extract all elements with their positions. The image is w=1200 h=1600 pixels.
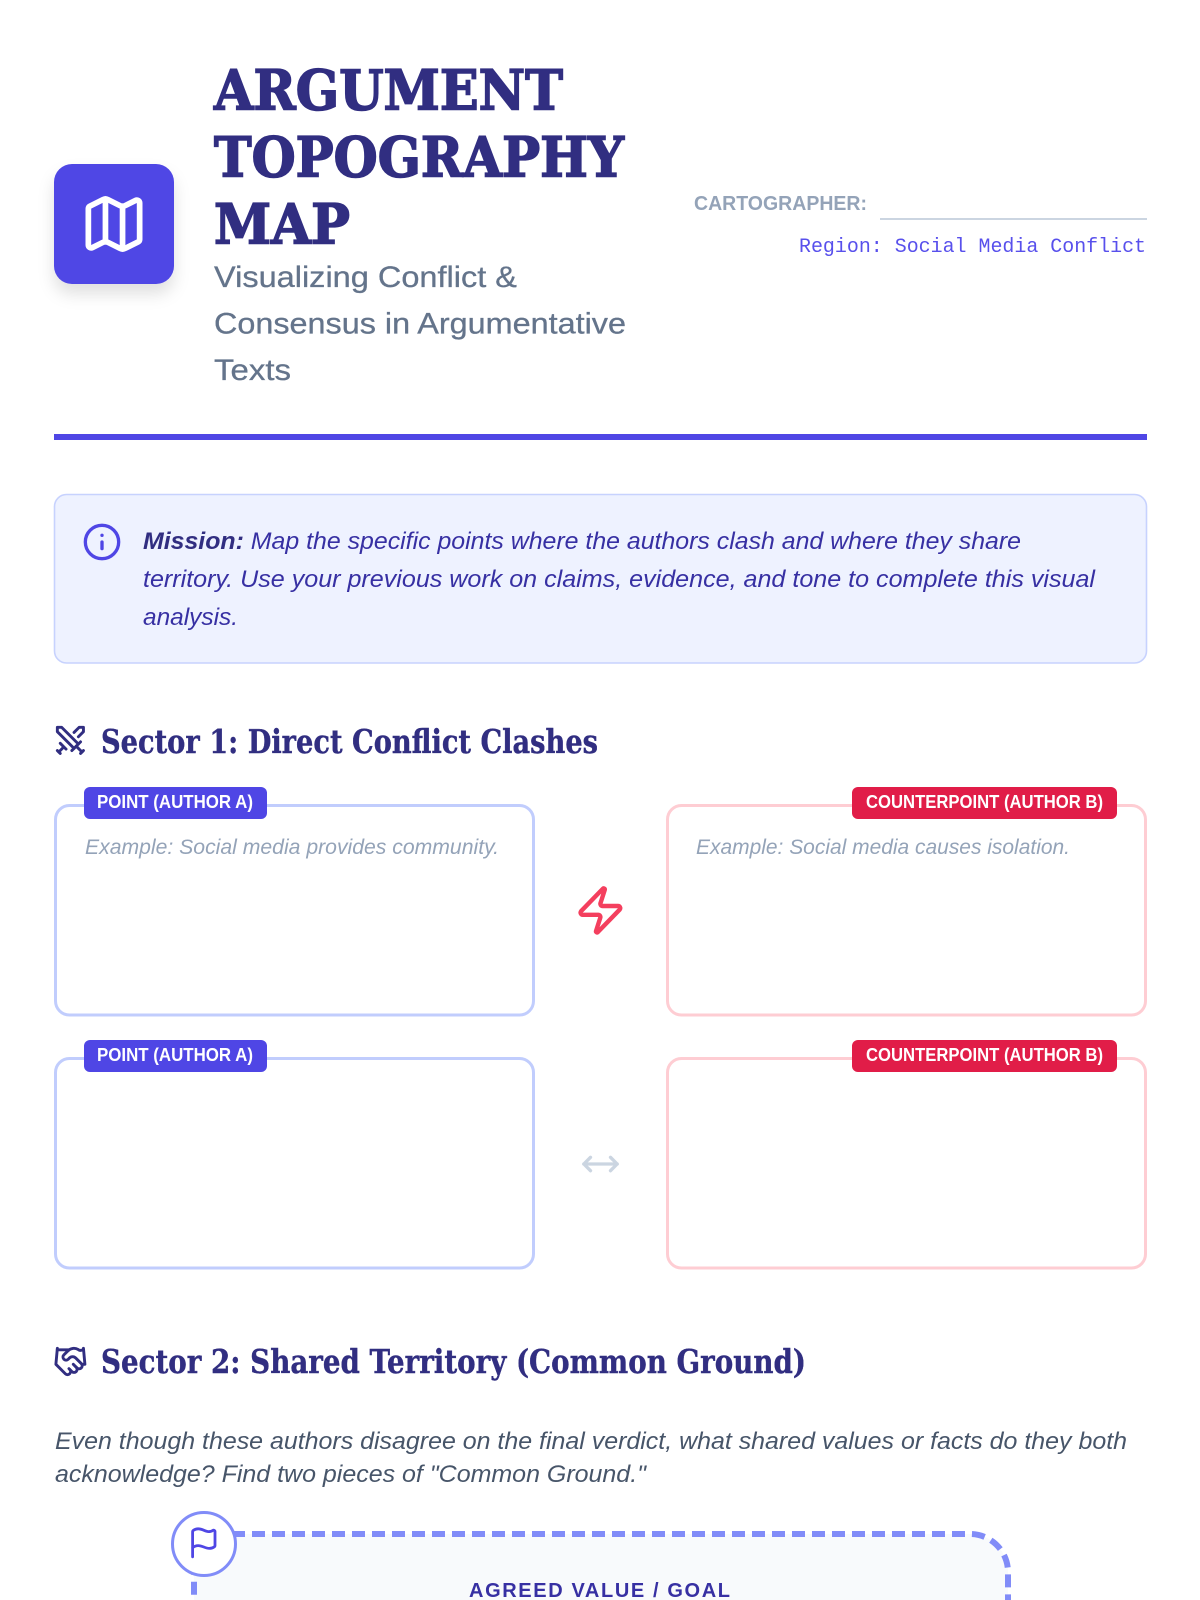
icon: handshake bbox=[56, 1348, 85, 1375]
icon: lightning bbox=[581, 888, 620, 932]
panel: point row 1: Example: Social media provides community. bbox=[85, 836, 499, 859]
icon: map bbox=[54, 164, 174, 284]
mission text: Mission: Map the specific points where the authors clash and where they share bbox=[143, 528, 1021, 555]
icon: info bbox=[85, 525, 119, 559]
arrow: two-way bbox=[584, 1157, 617, 1171]
cartographer field bbox=[694, 193, 1147, 259]
badge: counterpoint bbox=[852, 1040, 1117, 1072]
panel: agreed value bbox=[172, 1512, 1008, 1600]
badge: point: POINT (AUTHOR A) bbox=[97, 1045, 253, 1065]
title bbox=[213, 58, 625, 256]
badge: point bbox=[84, 787, 267, 819]
badge: counterpoint: COUNTERPOINT (AUTHOR B) bbox=[866, 1045, 1103, 1065]
instructions bbox=[55, 1428, 1127, 1488]
badge: point bbox=[84, 1040, 267, 1072]
badge: counterpoint: COUNTERPOINT (AUTHOR B) bbox=[866, 792, 1103, 812]
panel: counterpoint row 1: Example: Social media causes isolation. bbox=[696, 836, 1070, 859]
badge: counterpoint bbox=[852, 787, 1117, 819]
cartographer field: CARTOGRAPHER: bbox=[694, 193, 867, 215]
panel: counterpoint row 2 bbox=[668, 1040, 1146, 1268]
panel: point row 2 bbox=[56, 1040, 534, 1268]
icon: flag bbox=[172, 1512, 236, 1576]
panel: counterpoint row 1 bbox=[668, 787, 1146, 1015]
subtitle: Consensus in Argumentative bbox=[214, 308, 626, 340]
subtitle: Texts bbox=[214, 354, 291, 387]
title: MAP bbox=[214, 192, 350, 256]
mission text: analysis. bbox=[143, 604, 238, 631]
mission text bbox=[143, 528, 1096, 631]
heading: sector 1: Sector 1: Direct Conflict Clashes bbox=[101, 722, 598, 761]
panel: point row 1 bbox=[56, 787, 534, 1015]
icon: swords bbox=[57, 727, 83, 753]
instructions: acknowledge? Find two pieces of "Common Ground." bbox=[55, 1461, 648, 1488]
heading: sector 2: Sector 2: Shared Territory (Common Ground) bbox=[101, 1342, 806, 1381]
mission text: territory. Use your previous work on claims, evidence, and tone to complete this visual bbox=[143, 566, 1096, 593]
subtitle: Visualizing Conflict & bbox=[214, 261, 517, 294]
panel: mission bbox=[54, 494, 1146, 663]
header bbox=[54, 58, 1147, 387]
subtitle bbox=[214, 261, 626, 387]
cartographer field: Region: Social Media Conflict bbox=[799, 236, 1146, 259]
title: ARGUMENT bbox=[213, 58, 563, 122]
title: TOPOGRAPHY bbox=[214, 124, 625, 190]
badge: point: POINT (AUTHOR A) bbox=[97, 792, 253, 812]
instructions: Even though these authors disagree on the final verdict, what shared values or facts do they both bbox=[55, 1428, 1127, 1455]
